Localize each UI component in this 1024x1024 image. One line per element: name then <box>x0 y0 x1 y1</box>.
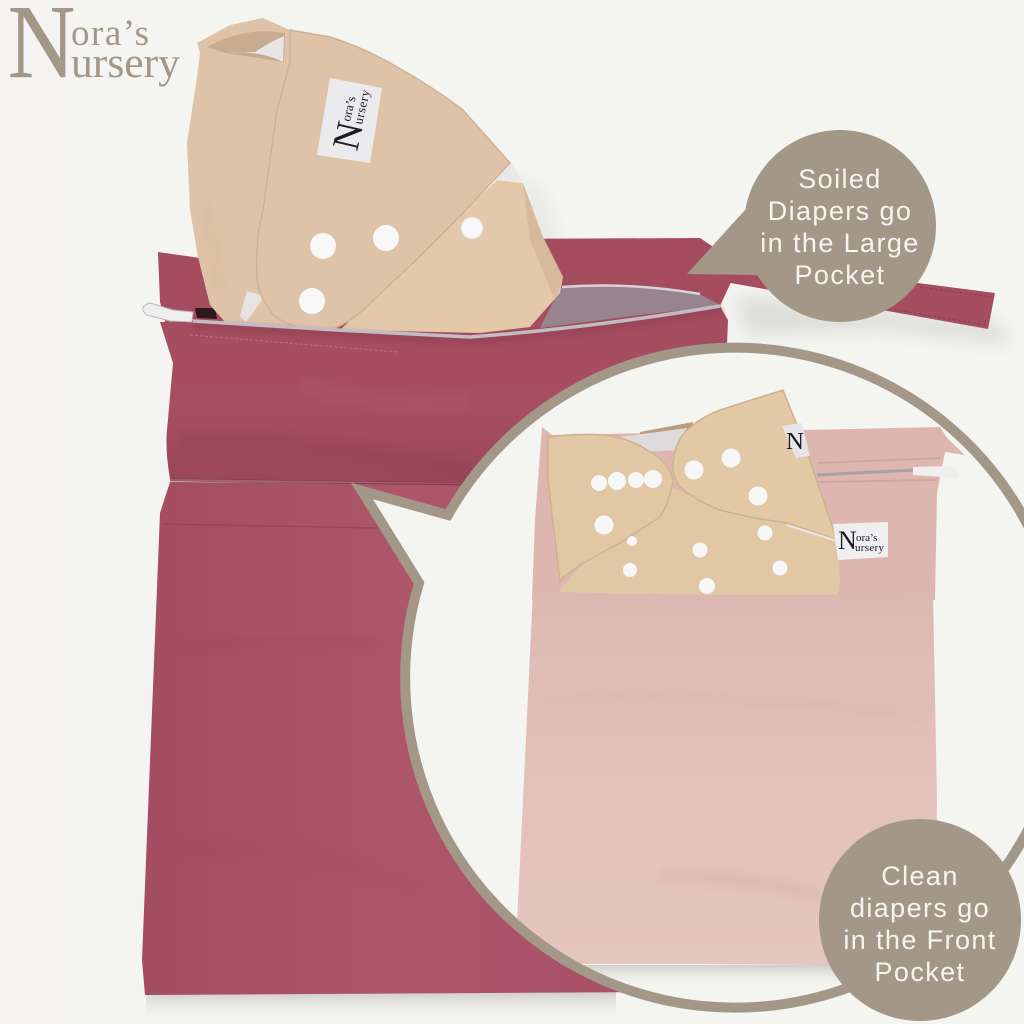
shadows behind bag and diaper <box>146 170 1010 1022</box>
logo: Nora's Nursery: ursery <box>71 40 180 87</box>
callout: soiled diapers: Diapers go <box>768 196 912 226</box>
zip seam <box>817 458 940 463</box>
diaper body back <box>187 18 300 330</box>
sewn label <box>833 522 888 560</box>
pink bag back <box>532 427 965 600</box>
flap tag: N <box>786 429 804 455</box>
pink front pocket <box>515 591 937 966</box>
lower pocket <box>142 480 650 995</box>
callout: clean diapers: in the Front <box>843 925 997 955</box>
right flap <box>673 390 837 540</box>
pocket folds <box>180 440 470 470</box>
circle fill <box>362 348 1024 1008</box>
flap edge binding <box>787 525 837 541</box>
diaper label: N <box>325 118 372 154</box>
diaper body <box>560 487 840 600</box>
diaper label <box>317 78 382 163</box>
waistband <box>640 422 693 434</box>
callout: soiled diapers: Pocket <box>795 260 885 290</box>
front upper pocket <box>160 306 728 483</box>
pocket seam stitching <box>162 524 380 528</box>
left flap <box>548 434 673 582</box>
diaper right wing <box>340 180 563 333</box>
inner waistband <box>207 31 285 62</box>
zipper <box>143 303 720 337</box>
bag opening lining <box>540 287 720 328</box>
clipped contents <box>500 390 965 989</box>
sewn label: ora’s <box>856 532 877 544</box>
pocket stitching <box>190 335 397 352</box>
callout: clean diapers: Pocket <box>875 957 965 987</box>
zipper pull <box>143 303 193 322</box>
diaper front flap <box>257 30 510 331</box>
logo: Nora's Nursery <box>8 0 180 100</box>
diaper snaps <box>299 217 483 314</box>
lower folds <box>160 640 380 650</box>
callout: clean diapers <box>819 819 1021 1021</box>
large wet bag: back panel <box>158 238 736 345</box>
callout: soiled diapers <box>687 130 936 322</box>
diaper label: ursery <box>350 88 373 126</box>
dark zipper gap <box>195 308 217 319</box>
sewn label: ursery <box>855 542 884 554</box>
callout circle: zoomed front pocket <box>362 348 1024 1008</box>
leg binding <box>240 291 265 322</box>
binding white <box>497 163 523 183</box>
zipper upper edge <box>562 286 700 294</box>
sewn label: N <box>838 526 857 555</box>
flap tag <box>782 423 810 458</box>
logo: Nora's Nursery: ora’s <box>71 13 149 54</box>
circle outline with tail <box>362 348 1024 1008</box>
small zipper <box>817 466 942 477</box>
pocket edge <box>170 480 470 484</box>
callout: clean diapers: diapers go <box>850 893 990 923</box>
callout: clean diapers: Clean <box>881 861 959 891</box>
diaper: large pocket <box>187 18 563 333</box>
callout: soiled diapers: Soiled <box>798 164 882 194</box>
strap: bag handle <box>725 258 995 329</box>
callout: soiled diapers: in the Large <box>760 228 920 258</box>
shadow under pink bag <box>584 965 837 978</box>
diaper label: ora’s <box>338 95 359 123</box>
small diaper <box>548 390 840 600</box>
snaps <box>591 448 788 594</box>
